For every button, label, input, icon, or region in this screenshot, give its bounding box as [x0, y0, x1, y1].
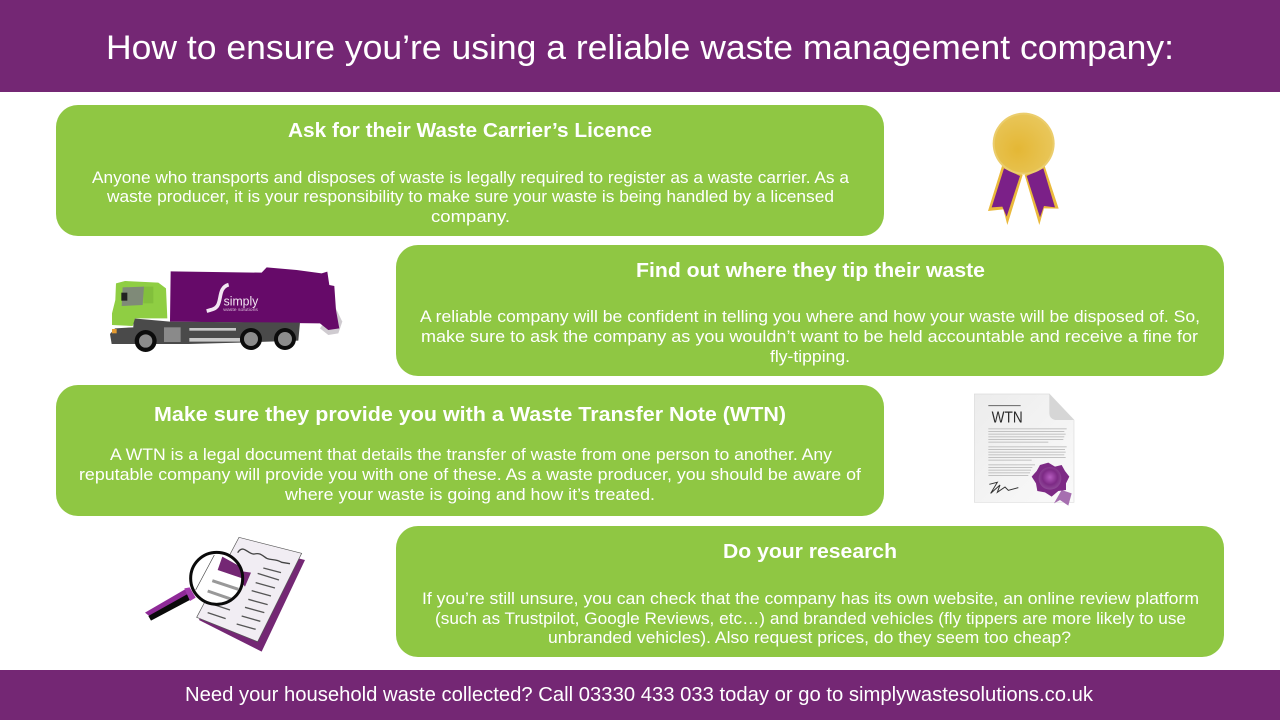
chassis	[110, 318, 300, 344]
heading: licence: Ask for their Waste Carrier’s Licence	[288, 120, 652, 142]
logo	[207, 285, 229, 311]
text block: WTN: reputable company will provide you with one of these. As a waste producer, you should be aware of	[79, 466, 861, 484]
footer call to action: Need your household waste collected? Call 03330 433 033 today or go to simplywastesolutions.co.uk	[185, 684, 1094, 706]
wheels	[135, 330, 157, 352]
icon: waste truck: simply	[224, 295, 259, 309]
header band	[0, 0, 1280, 92]
icon: waste truck	[110, 267, 342, 352]
heading: tip: Find out where they tip their waste	[636, 260, 985, 282]
text block: WTN: A WTN is a legal document that details the transfer of waste from one person to another. Any	[110, 446, 833, 464]
heading: WTN: Make sure they provide you with a Waste Transfer Note (WTN)	[154, 404, 786, 426]
text block: tip	[420, 308, 1200, 366]
text block: licence: waste producer, it is your responsibility to make sure your waste is being handled by a licensed	[106, 188, 834, 206]
icon: waste truck: waste solutions	[223, 307, 258, 312]
text block: research: unbranded vehicles). Also request prices, do they seem too cheap?	[548, 629, 1071, 647]
rear shadow	[320, 307, 342, 335]
text block: WTN	[79, 446, 861, 504]
icon: WTN document: WTN	[992, 409, 1023, 426]
icon: magnifier over document	[145, 537, 305, 652]
heading: research: Do your research	[723, 541, 897, 563]
text block: tip: make sure to ask the company as you wouldn’t want to be held accountable and receive a fine for	[421, 328, 1199, 346]
text block: research: If you’re still unsure, you can check that the company has its own website, an online review platform	[422, 590, 1199, 608]
panel: waste transfer note	[56, 385, 884, 516]
footer band	[0, 670, 1280, 720]
panel: where they tip	[396, 245, 1224, 376]
text block: licence: Anyone who transports and disposes of waste is legally required to register as a waste carrier. As a	[92, 169, 850, 187]
text block: licence	[92, 169, 850, 226]
compactor body	[170, 267, 339, 330]
text block: research: (such as Trustpilot, Google Reviews, etc…) and branded vehicles (fly tippers are more likely to use	[435, 610, 1186, 628]
text block: licence: company.	[431, 208, 510, 226]
icon: award ribbon	[988, 113, 1059, 225]
cab	[112, 281, 167, 326]
text block: research	[422, 590, 1199, 647]
text block: WTN: where your waste is going and how it’s treated.	[284, 486, 655, 504]
panel: waste carrier's licence	[56, 105, 884, 236]
text block: tip: fly-tipping.	[770, 348, 850, 366]
title: How to ensure you’re using a reliable waste management company:	[106, 29, 1174, 67]
panel: do your research	[396, 526, 1224, 657]
icon: WTN document	[974, 394, 1074, 506]
text block: tip: A reliable company will be confident in telling you where and how your waste will be disposed of. So,	[420, 308, 1200, 326]
